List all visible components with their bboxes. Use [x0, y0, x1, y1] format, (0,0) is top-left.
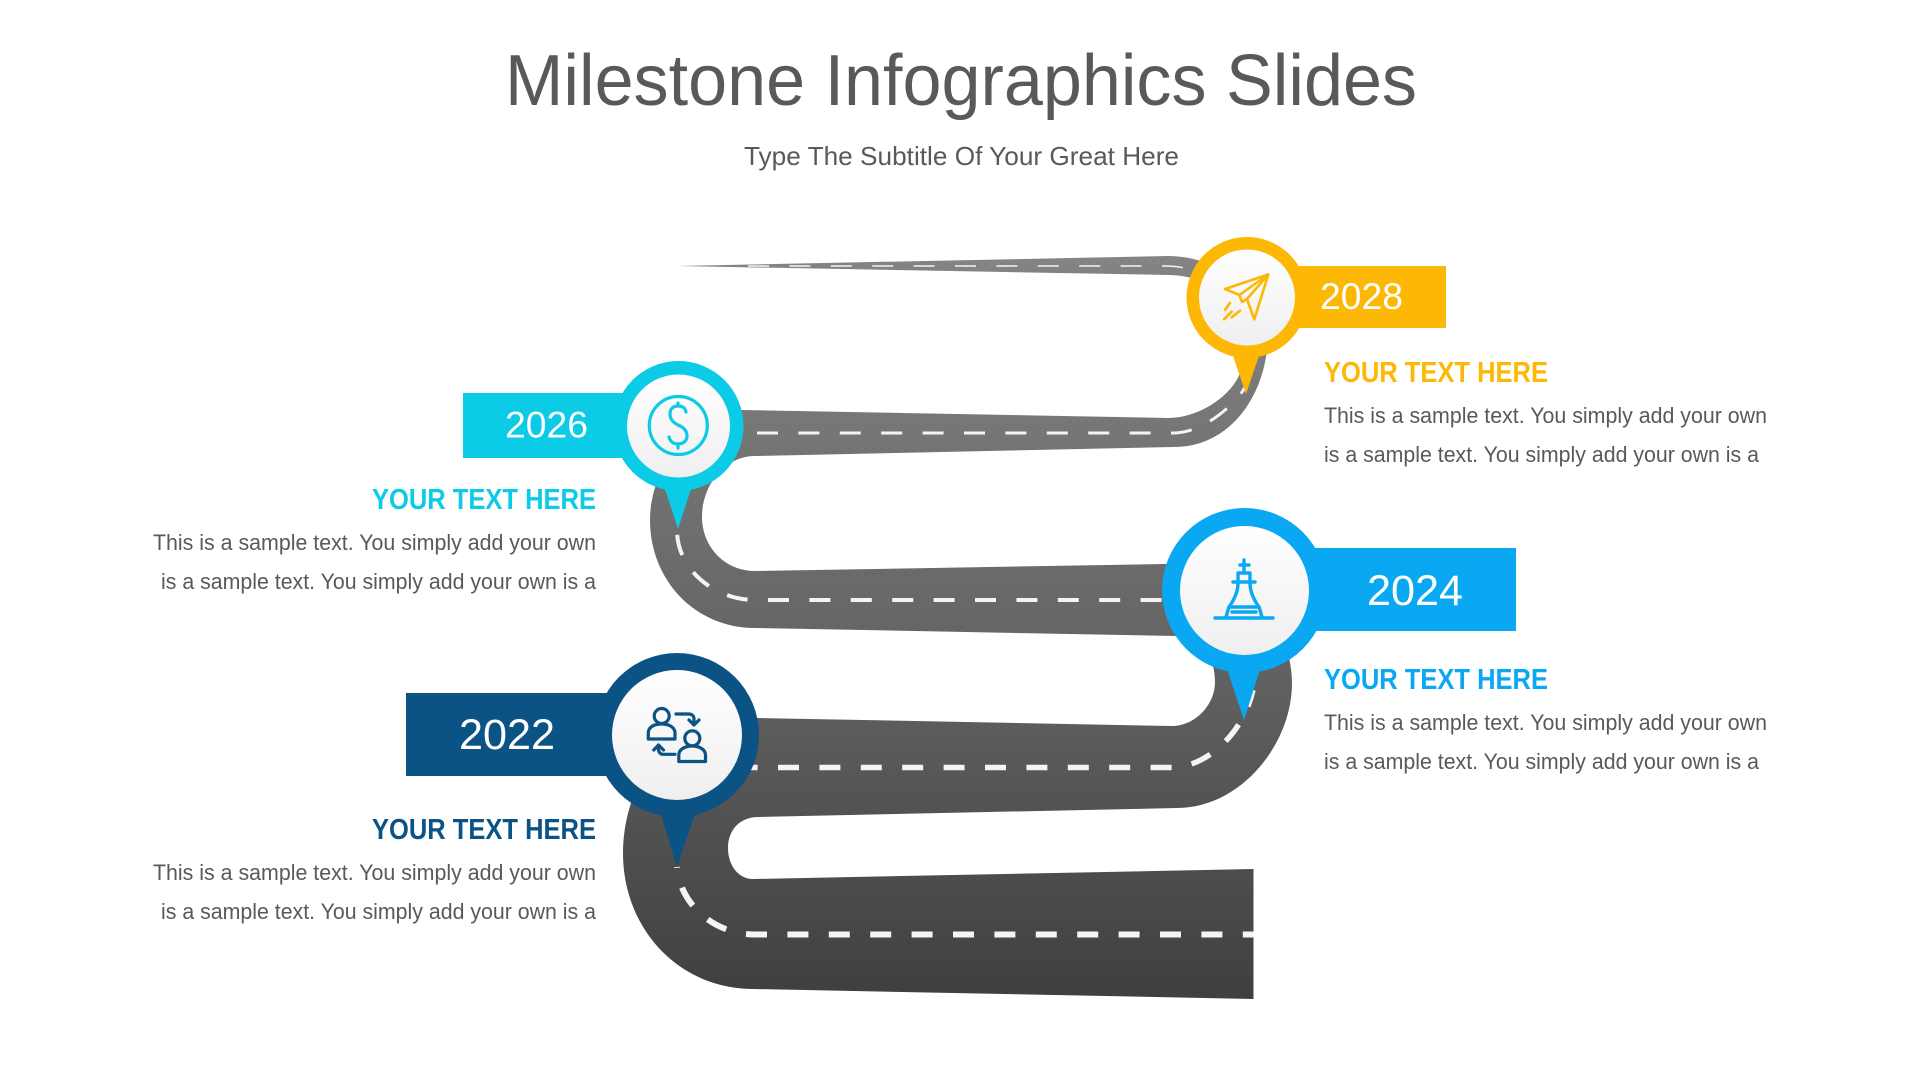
milestone text: 2022: This is a sample text. You simply add your own	[153, 860, 596, 885]
milestone text: 2026: This is a sample text. You simply add your own	[153, 530, 596, 555]
milestone text: 2028: YOUR TEXT HERE	[1324, 357, 1548, 389]
milestone text: 2024: is a sample text. You simply add your own is a	[1324, 749, 1760, 774]
milestone text: 2024: YOUR TEXT HERE	[1324, 664, 1548, 696]
milestone text: 2028: This is a sample text. You simply add your own	[1324, 403, 1767, 428]
milestone text: 2024	[1324, 664, 1767, 774]
milestone text: 2024: This is a sample text. You simply add your own	[1324, 710, 1767, 735]
milestone text: 2026: is a sample text. You simply add your own is a	[161, 569, 597, 594]
milestone text: 2026	[153, 484, 597, 594]
year label: 2026: 2026	[505, 404, 588, 446]
icon: dollar coin	[649, 396, 707, 454]
milestone pin: 2028	[1186, 237, 1446, 394]
milestone text: 2026: YOUR TEXT HERE	[372, 484, 596, 516]
milestone text: 2022	[153, 814, 597, 924]
milestone text: 2028: is a sample text. You simply add your own is a	[1324, 442, 1760, 467]
milestone text: 2028	[1324, 357, 1767, 467]
icon: people exchange	[648, 708, 706, 762]
title: Milestone Infographics Slides	[505, 41, 1417, 121]
milestone text: 2022: is a sample text. You simply add your own is a	[161, 899, 597, 924]
milestone pin: 2024	[1162, 508, 1516, 720]
milestone pin: 2022	[406, 653, 759, 867]
milestone pin: 2026	[463, 361, 744, 529]
milestone text: 2022: YOUR TEXT HERE	[372, 814, 596, 846]
subtitle: Type The Subtitle Of Your Great Here	[744, 141, 1179, 171]
year label: 2028: 2028	[1320, 276, 1403, 317]
year label: 2022: 2022	[459, 711, 555, 759]
icon: paper plane	[1224, 274, 1268, 319]
icon: chess king	[1215, 560, 1273, 618]
year label: 2024: 2024	[1367, 567, 1463, 615]
winding road	[623, 256, 1292, 999]
